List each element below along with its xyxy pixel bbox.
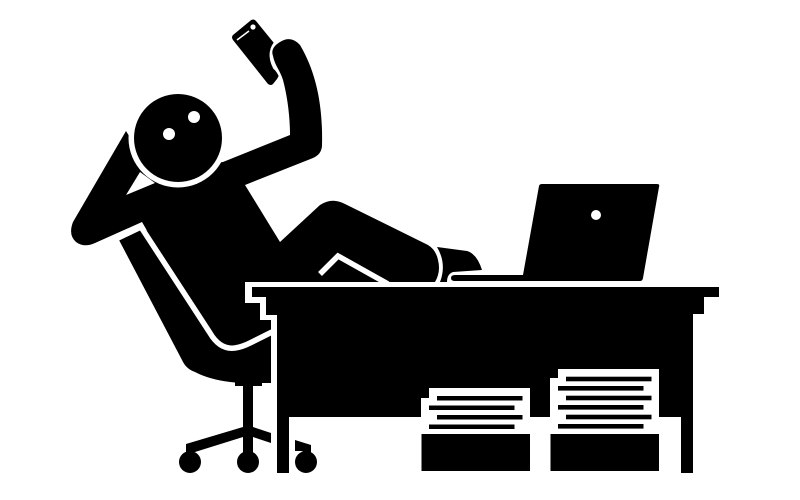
- right file box: [550, 434, 659, 471]
- icon: smartphone: [232, 20, 282, 85]
- head with eyes: [126, 88, 228, 195]
- desk: [245, 282, 719, 473]
- icon: chair: [119, 225, 317, 473]
- left paper stack: [421, 388, 530, 434]
- left file box: [422, 434, 530, 471]
- chair back highlight: [118, 227, 272, 348]
- right paper stack: [550, 369, 659, 434]
- figure: body with raised arm and leg: [71, 39, 439, 348]
- icon: shoe: [437, 247, 482, 282]
- knee highlight: [320, 256, 388, 284]
- icon: laptop: [451, 184, 659, 281]
